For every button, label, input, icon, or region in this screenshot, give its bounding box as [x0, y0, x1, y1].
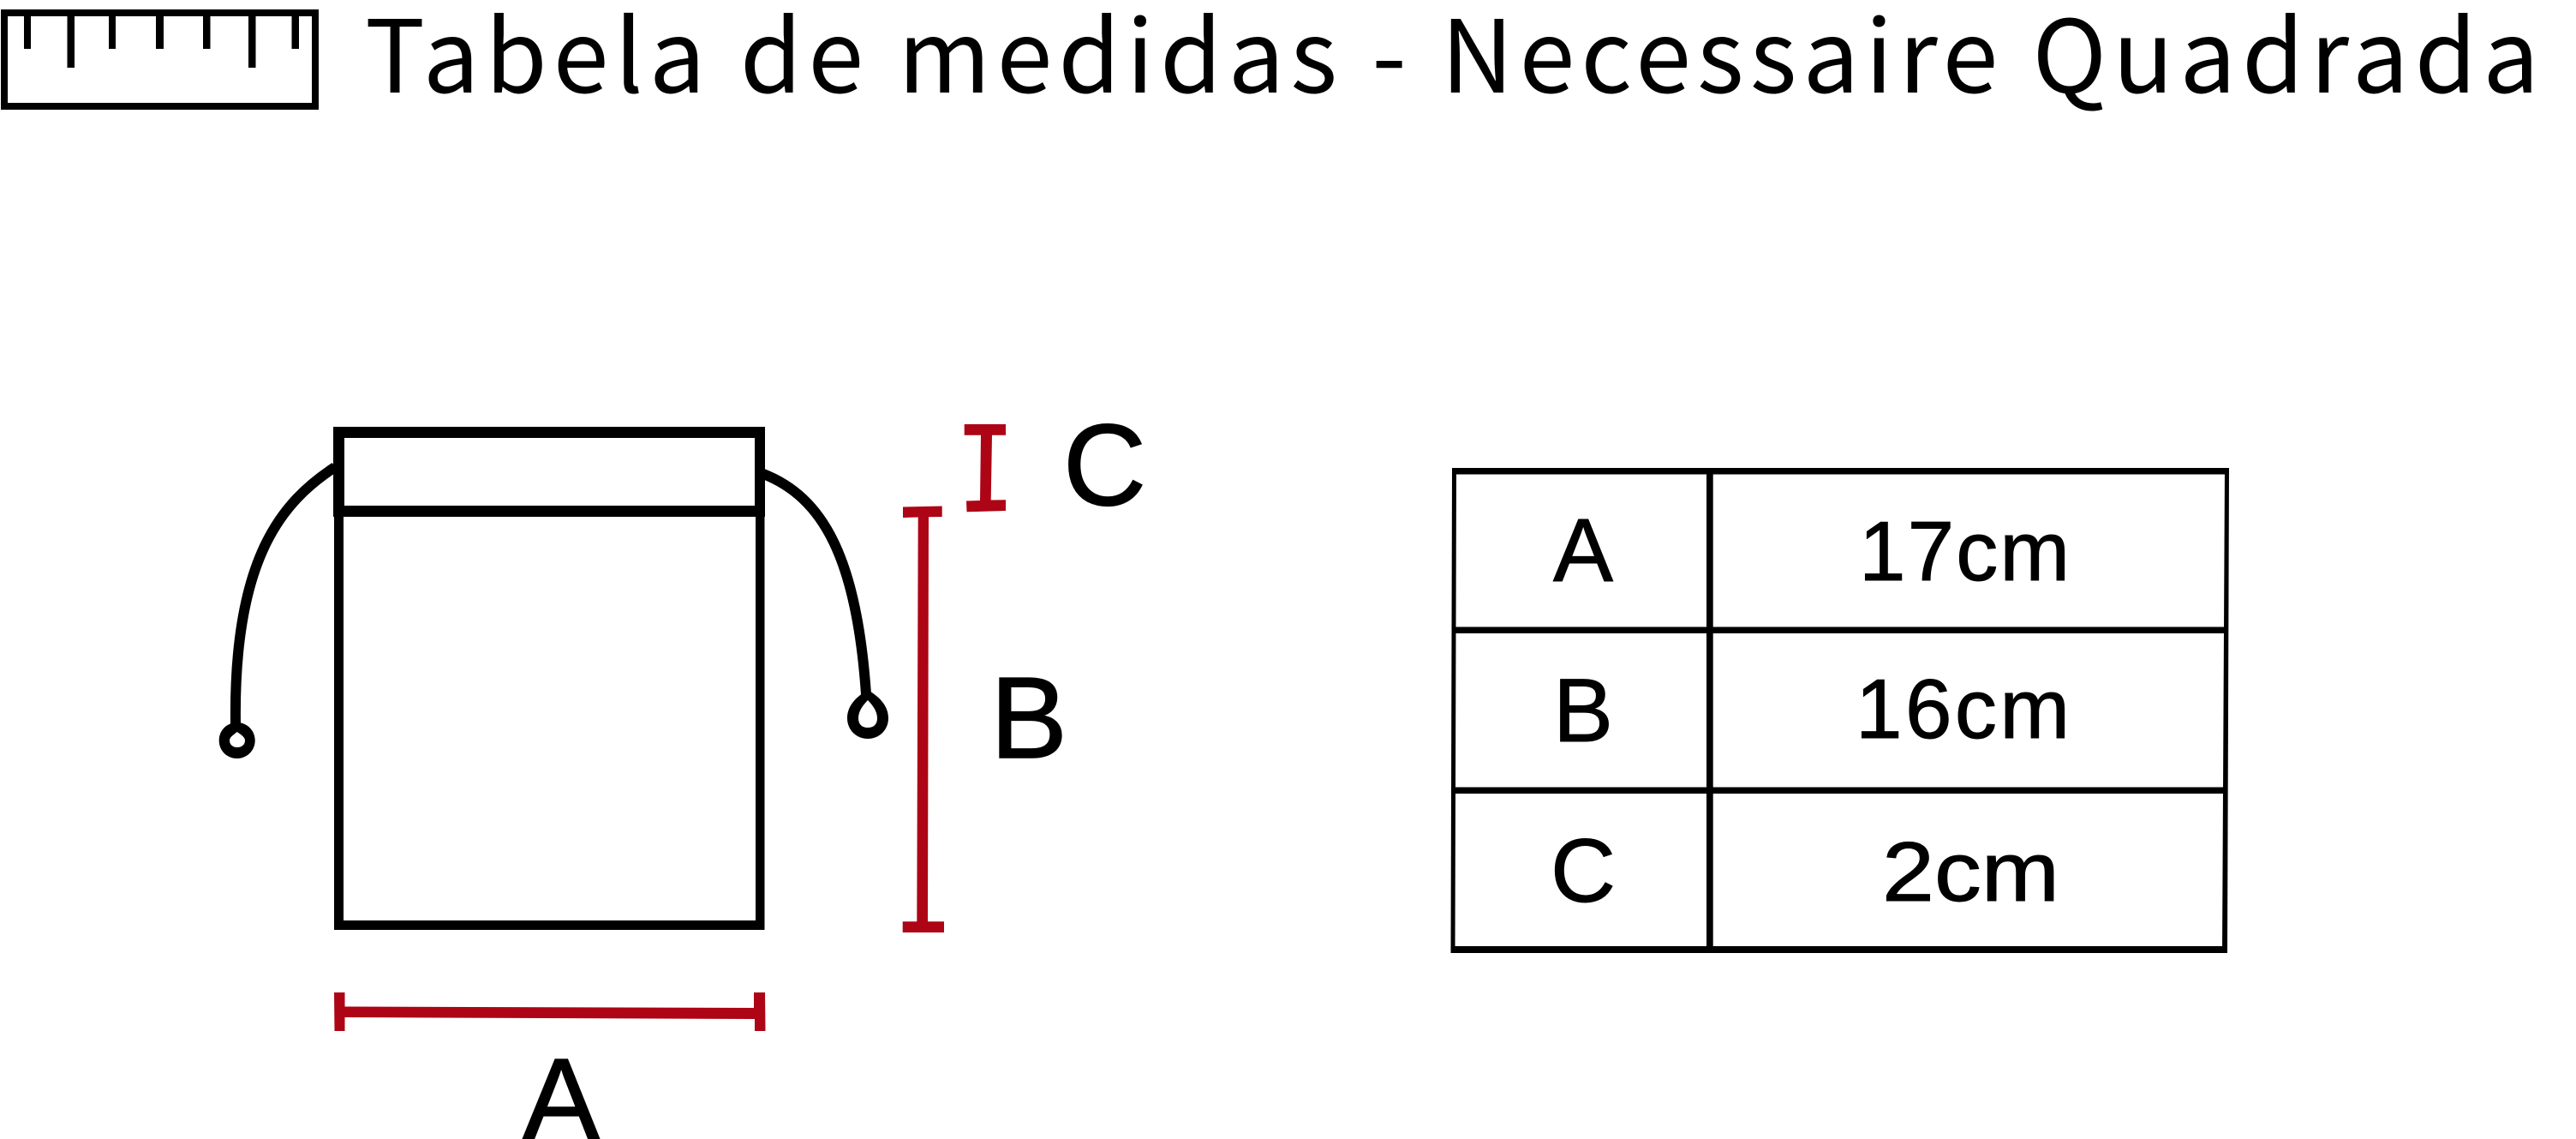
dimension: C bracket — [965, 424, 1006, 512]
row A: 17cm — [1859, 504, 2070, 598]
row C: C — [1551, 821, 1616, 921]
row A: A — [1553, 501, 1613, 601]
row C: 2cm — [1882, 824, 2059, 919]
dimension: A bracket — [334, 992, 766, 1031]
dimension: B bracket — [903, 506, 944, 932]
row B — [1553, 661, 2070, 761]
table — [1451, 468, 2229, 953]
drawstring: left — [219, 467, 335, 758]
label: B: B — [990, 653, 1067, 782]
bag top band — [333, 427, 765, 517]
diagram: bag — [219, 427, 888, 930]
table grid — [1451, 468, 2229, 953]
row C — [1551, 821, 2059, 921]
bag body — [334, 510, 764, 930]
row B: 16cm — [1856, 662, 2070, 756]
drawstring: right — [763, 474, 888, 739]
icon: ruler — [1, 9, 319, 110]
row A — [1553, 501, 2070, 601]
row B: B — [1553, 661, 1613, 761]
label: C: C — [1063, 400, 1146, 530]
